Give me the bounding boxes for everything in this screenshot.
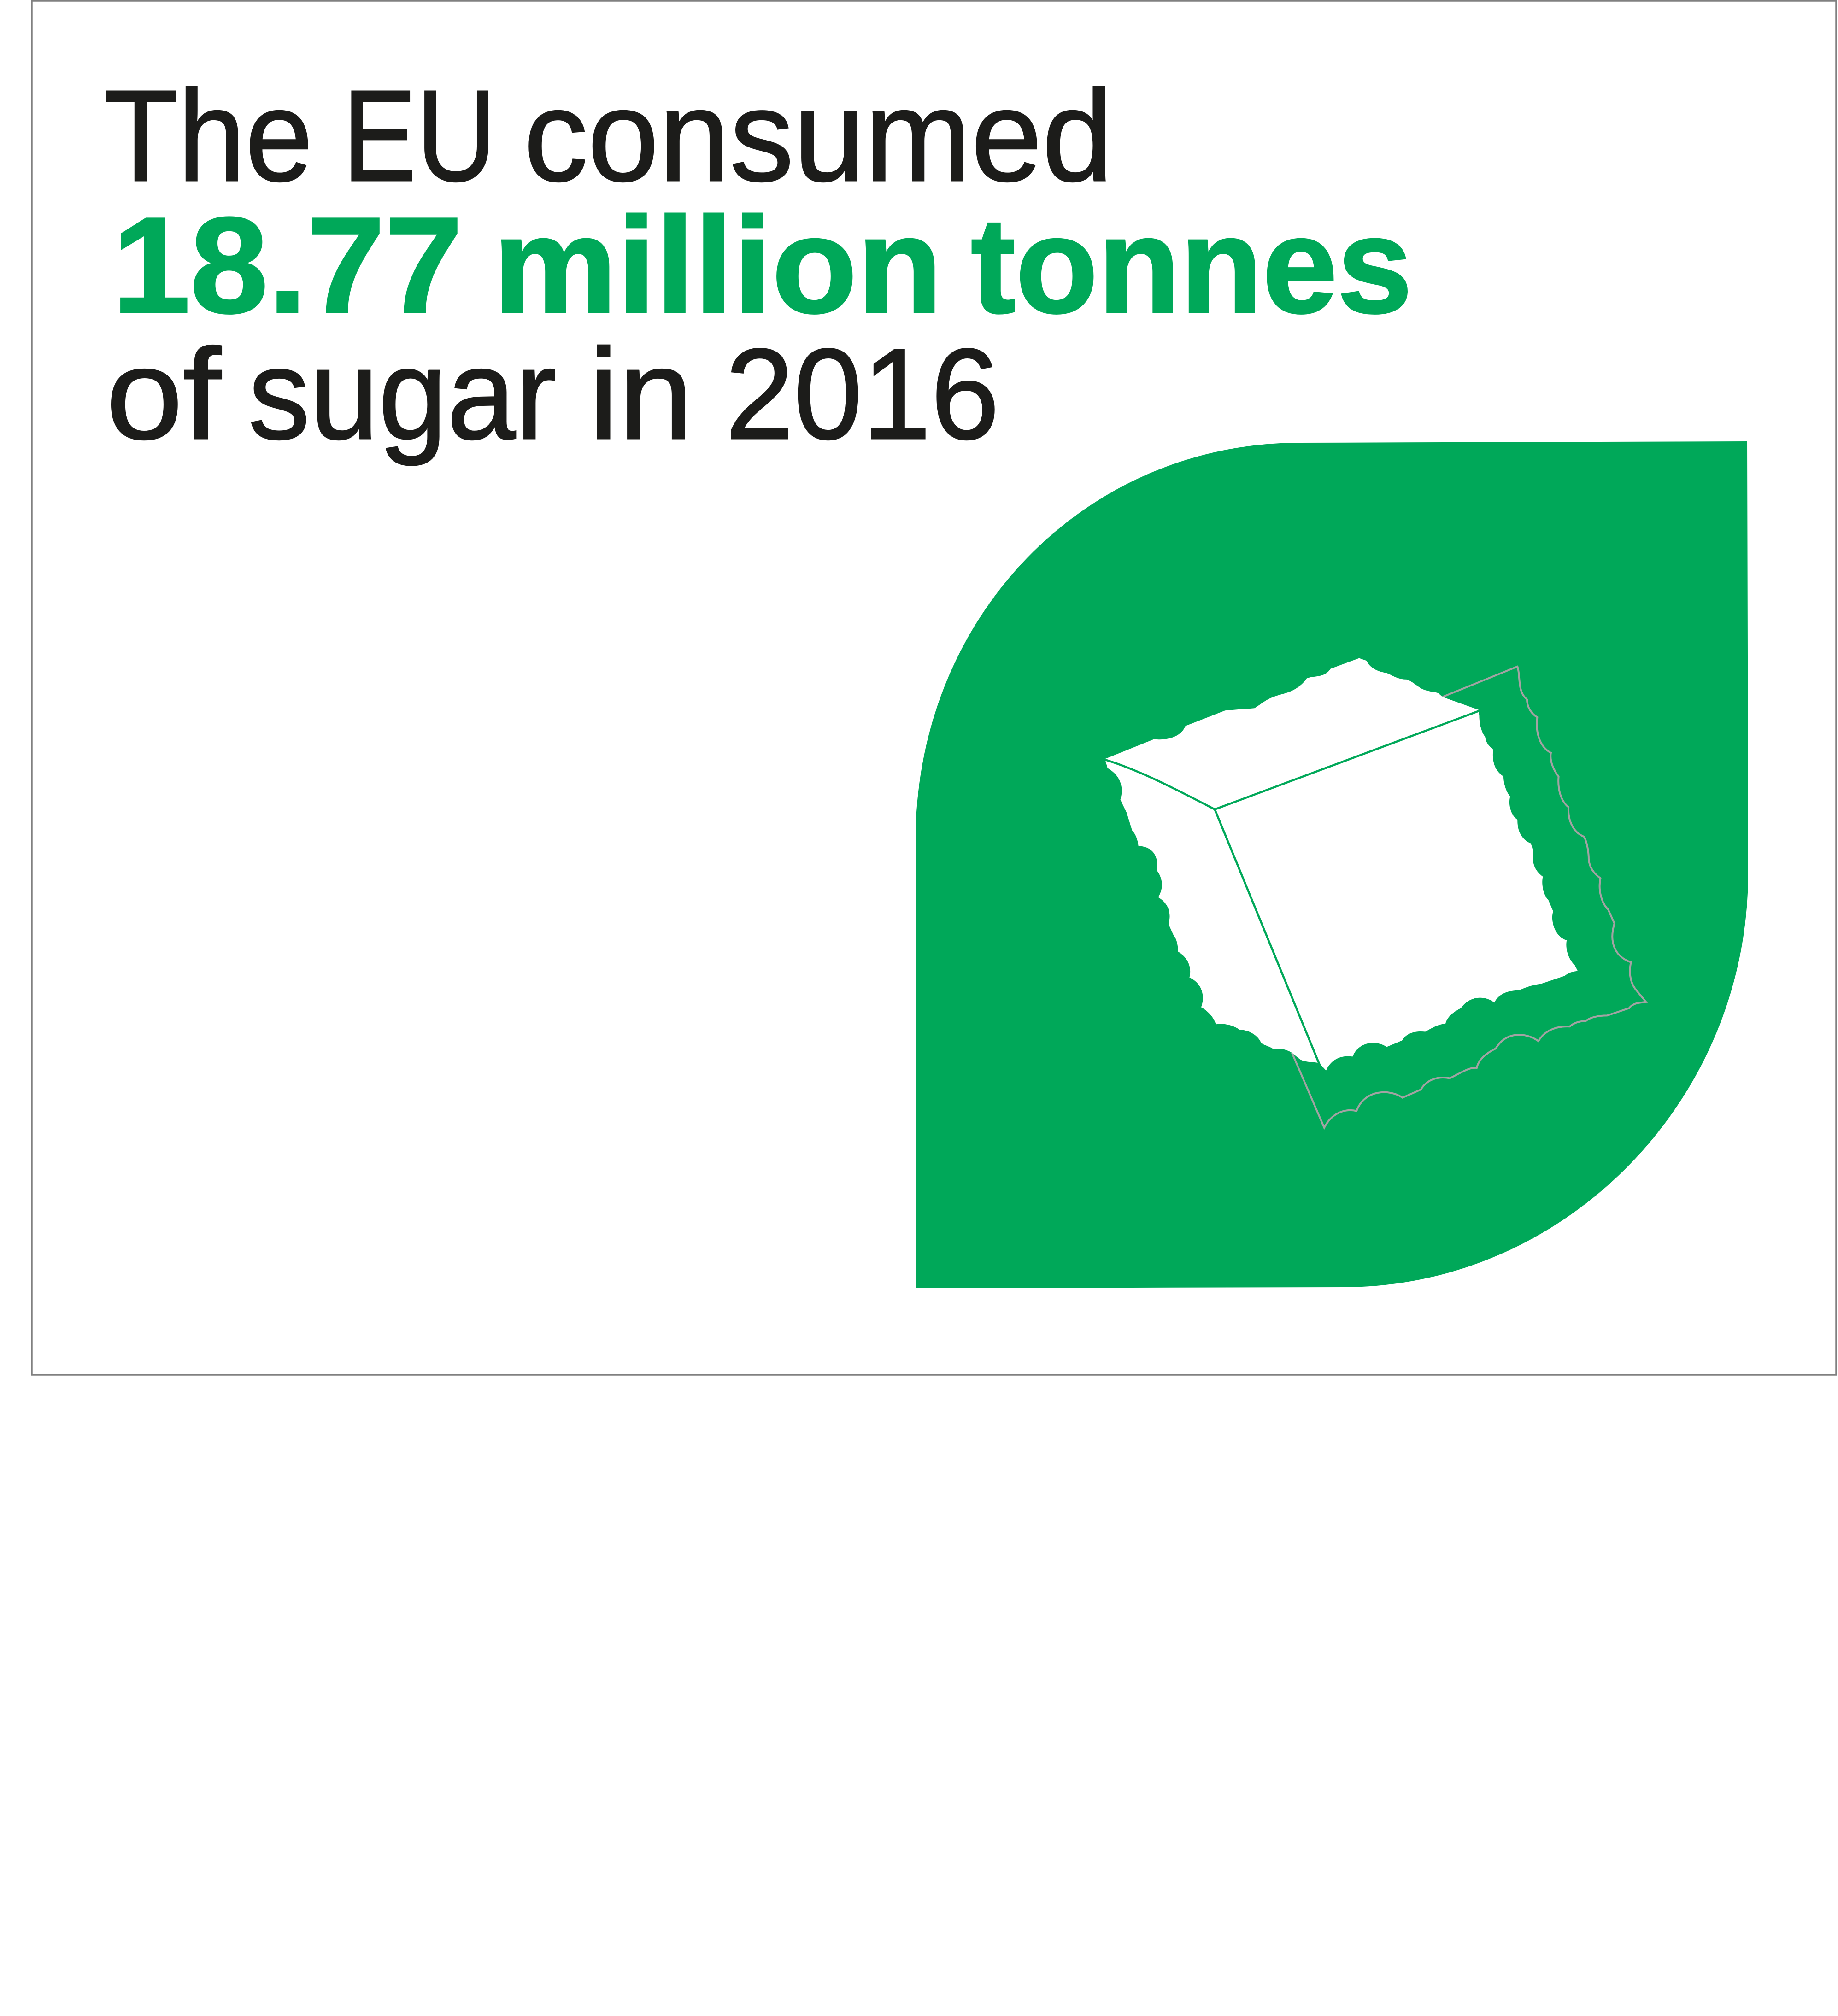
- title line 3: of: [106, 322, 222, 466]
- title: [104, 63, 1412, 467]
- sugar cube offset outline: [1292, 667, 1646, 1128]
- sugar cube edges: [1105, 711, 1479, 1065]
- icon: green leaf shape: [916, 441, 1748, 1288]
- title line 3: sugar: [248, 322, 557, 467]
- title line 3: in: [589, 322, 693, 466]
- title line 2: highlighted figure: million: [493, 189, 942, 341]
- title line 1: consumed: [524, 63, 1113, 208]
- title line 2: highlighted figure: 18.77: [112, 189, 463, 341]
- title line 2: highlighted figure: [112, 189, 1412, 341]
- panel frame: [32, 1, 1836, 1375]
- title line 1: EU: [343, 63, 496, 208]
- icon: sugar cube: [1105, 658, 1646, 1128]
- title line 1: The: [104, 63, 313, 208]
- title line 1: [104, 63, 1113, 208]
- title line 2: highlighted figure: tonnes: [971, 189, 1412, 341]
- title line 3: 2016: [725, 322, 999, 466]
- sugar cube white body: [1105, 658, 1578, 1071]
- title line 3: [106, 322, 999, 467]
